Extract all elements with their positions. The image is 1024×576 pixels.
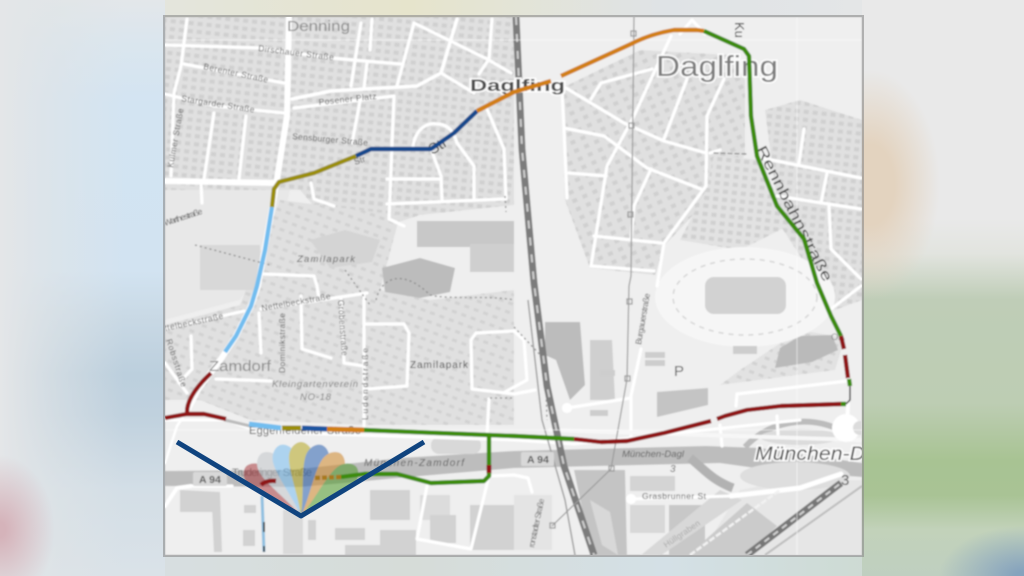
- street and place labels: ttelbeckstraße: [163, 311, 224, 333]
- industrial buildings: [574, 346, 862, 556]
- street and place labels: Daglfing: [656, 51, 778, 83]
- route: black connector near roundabout: [846, 386, 850, 404]
- stadium: [672, 246, 836, 342]
- faint image seams: [165, 17, 862, 555]
- street and place labels: Str: [426, 134, 451, 158]
- route: dark blue upper: [356, 111, 477, 156]
- street and place labels: München-Dagl: [622, 449, 685, 460]
- street and place labels: Burgauerstraße: [633, 292, 652, 345]
- street and place labels: Nettelbeckstraße: [261, 291, 332, 313]
- route: orange lower: [327, 429, 364, 430]
- street and place labels: Warthestraße: [163, 206, 204, 228]
- street and place labels: Daglfing: [656, 51, 778, 83]
- route: light blue lower: [249, 424, 281, 428]
- street and place labels: Grasbrunner St: [642, 491, 707, 501]
- panel: street map: [163, 17, 867, 556]
- street and place labels: 3: [670, 464, 676, 475]
- street and place labels: 3: [841, 472, 849, 489]
- railway main line: [516, 17, 594, 555]
- street and place labels: Daglfing: [470, 76, 565, 95]
- street and place labels: Dirschauer Straße: [258, 43, 335, 62]
- lower left blocks: [180, 490, 552, 555]
- street and place labels: Stargarder Straße: [181, 93, 256, 115]
- street and place labels: Hüllgraben: [662, 518, 702, 550]
- street and place labels: Kleingartenverein: [272, 379, 358, 390]
- motorway shields A94: A 94: [527, 454, 549, 466]
- route: light blue south: [262, 496, 264, 552]
- street and place labels: Gröbenstraße: [336, 299, 350, 356]
- street and place labels: Rennbahnstraße: [752, 143, 836, 284]
- route: red lower: [574, 404, 841, 442]
- route: orange upper: [477, 30, 704, 111]
- street and place labels: P: [674, 363, 684, 380]
- street and place labels: NO-18: [300, 392, 332, 403]
- map shadow: [163, 15, 864, 557]
- street and place labels: Kulmer Straße: [165, 107, 185, 168]
- street and place labels: Daglfing: [470, 76, 565, 95]
- route: blue lower: [302, 428, 327, 429]
- route: olive upper: [272, 156, 356, 207]
- street and place labels: [163, 18, 865, 550]
- power line with pylons: [550, 17, 636, 528]
- streets: [165, 17, 867, 549]
- street and place labels: Posener Platz: [318, 91, 377, 107]
- street and place labels: OA: [831, 332, 845, 343]
- route segments: [165, 30, 850, 552]
- motorway A94: [165, 422, 862, 490]
- dotted paths: [195, 196, 547, 420]
- street and place labels: Dominikstraße: [277, 313, 287, 373]
- motorway shields A94: [193, 452, 554, 486]
- street and place labels: ronstadter Straße: [526, 497, 546, 548]
- route: light blue upper: [225, 207, 272, 352]
- blue V marker: [177, 442, 424, 516]
- street and place labels: Zamilapark: [410, 360, 469, 371]
- street and place labels: Ku: [732, 22, 747, 38]
- route: black marks south: [263, 522, 265, 552]
- route: green junction dots: [841, 379, 850, 404]
- street and place labels: München-Zamdorf: [364, 458, 465, 469]
- route: red west: [165, 373, 226, 419]
- route: green upper right: [704, 31, 841, 336]
- fan of coloured petals: [243, 441, 359, 513]
- street and place labels: Robsstraße: [164, 338, 189, 388]
- street and place labels: Sensburger Straße: [292, 131, 369, 148]
- motorway shields A94: A 94: [199, 474, 221, 486]
- route: green side loop: [341, 436, 489, 483]
- route: red short arc: [261, 481, 276, 485]
- route: dashed multicolour overlap: [314, 477, 341, 478]
- street and place labels: München-D: [755, 444, 865, 465]
- route: olive lower: [282, 426, 301, 430]
- street and place labels: Berenter Straße: [203, 61, 269, 85]
- route: red right section: [841, 336, 848, 378]
- route: red marker on loop: [486, 465, 492, 473]
- street and place labels: Zamdorf: [209, 358, 272, 375]
- street and place labels: Eggenfeldener Straße: [249, 425, 361, 437]
- map base: [165, 17, 862, 555]
- route: green lower straight: [364, 430, 574, 439]
- street and place labels: München-D: [755, 444, 865, 465]
- street and place labels: Str: [353, 154, 367, 167]
- street and place labels: Denning: [287, 18, 350, 35]
- railway lower right: [690, 483, 862, 555]
- residential areas: [165, 17, 862, 425]
- street and place labels: Truderinger Straße: [232, 467, 312, 479]
- street and place labels: Zamilapark: [296, 254, 356, 265]
- parks and large buildings: [200, 221, 838, 400]
- street and place labels: Ludendstraße: [360, 348, 370, 420]
